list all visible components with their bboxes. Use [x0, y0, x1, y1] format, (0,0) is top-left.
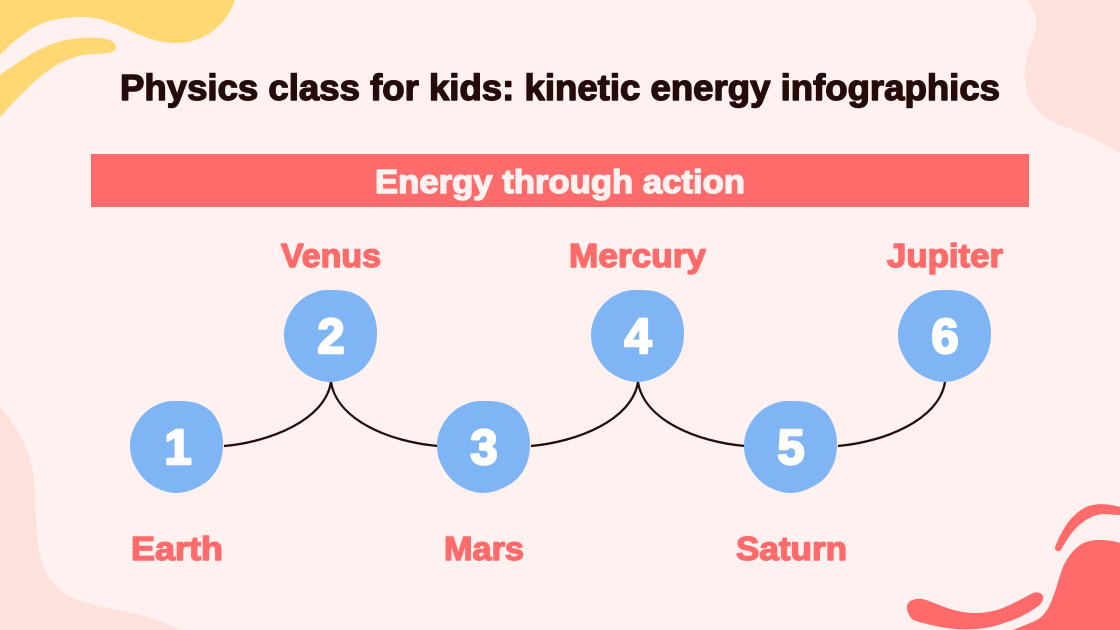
decoration: top-right peach blob — [1025, 0, 1120, 153]
decoration: bottom-left peach blob — [0, 407, 180, 630]
node 6: Jupiter — [887, 237, 1003, 382]
decoration: bottom-right red arc — [1055, 504, 1120, 551]
banner: Energy through action: Energy through action — [375, 163, 745, 200]
decoration: bottom-right red blob — [1013, 540, 1120, 630]
node 1: Earth — [130, 401, 223, 567]
node 2: Venus — [281, 237, 381, 382]
node 2: Venus: Venus — [281, 237, 381, 274]
connector lines — [224, 382, 945, 446]
node 6: Jupiter: Jupiter — [887, 237, 1003, 274]
node 4: Mercury: 4 — [624, 310, 652, 364]
node 5: Saturn: 5 — [777, 421, 805, 475]
node 4: Mercury: Mercury — [569, 237, 707, 274]
node 1: Earth: 1 — [164, 421, 192, 475]
decoration: top-left yellow blob — [0, 0, 235, 55]
node 5: Saturn — [736, 401, 847, 567]
banner: Energy through action — [91, 154, 1029, 207]
node 2: Venus: 2 — [317, 310, 345, 364]
node 1: Earth: Earth — [131, 530, 223, 567]
title: Physics class for kids: kinetic energy infographics — [120, 67, 1000, 108]
node 3: Mars: Mars — [444, 530, 524, 567]
node 4: Mercury — [569, 237, 707, 382]
decoration: top-left yellow stroke — [0, 38, 116, 117]
node 5: Saturn: Saturn — [736, 530, 847, 567]
node 3: Mars: 3 — [470, 421, 498, 475]
node 3: Mars — [437, 401, 530, 567]
decoration: bottom-right red stroke — [907, 592, 1043, 629]
node 6: Jupiter: 6 — [931, 310, 959, 364]
